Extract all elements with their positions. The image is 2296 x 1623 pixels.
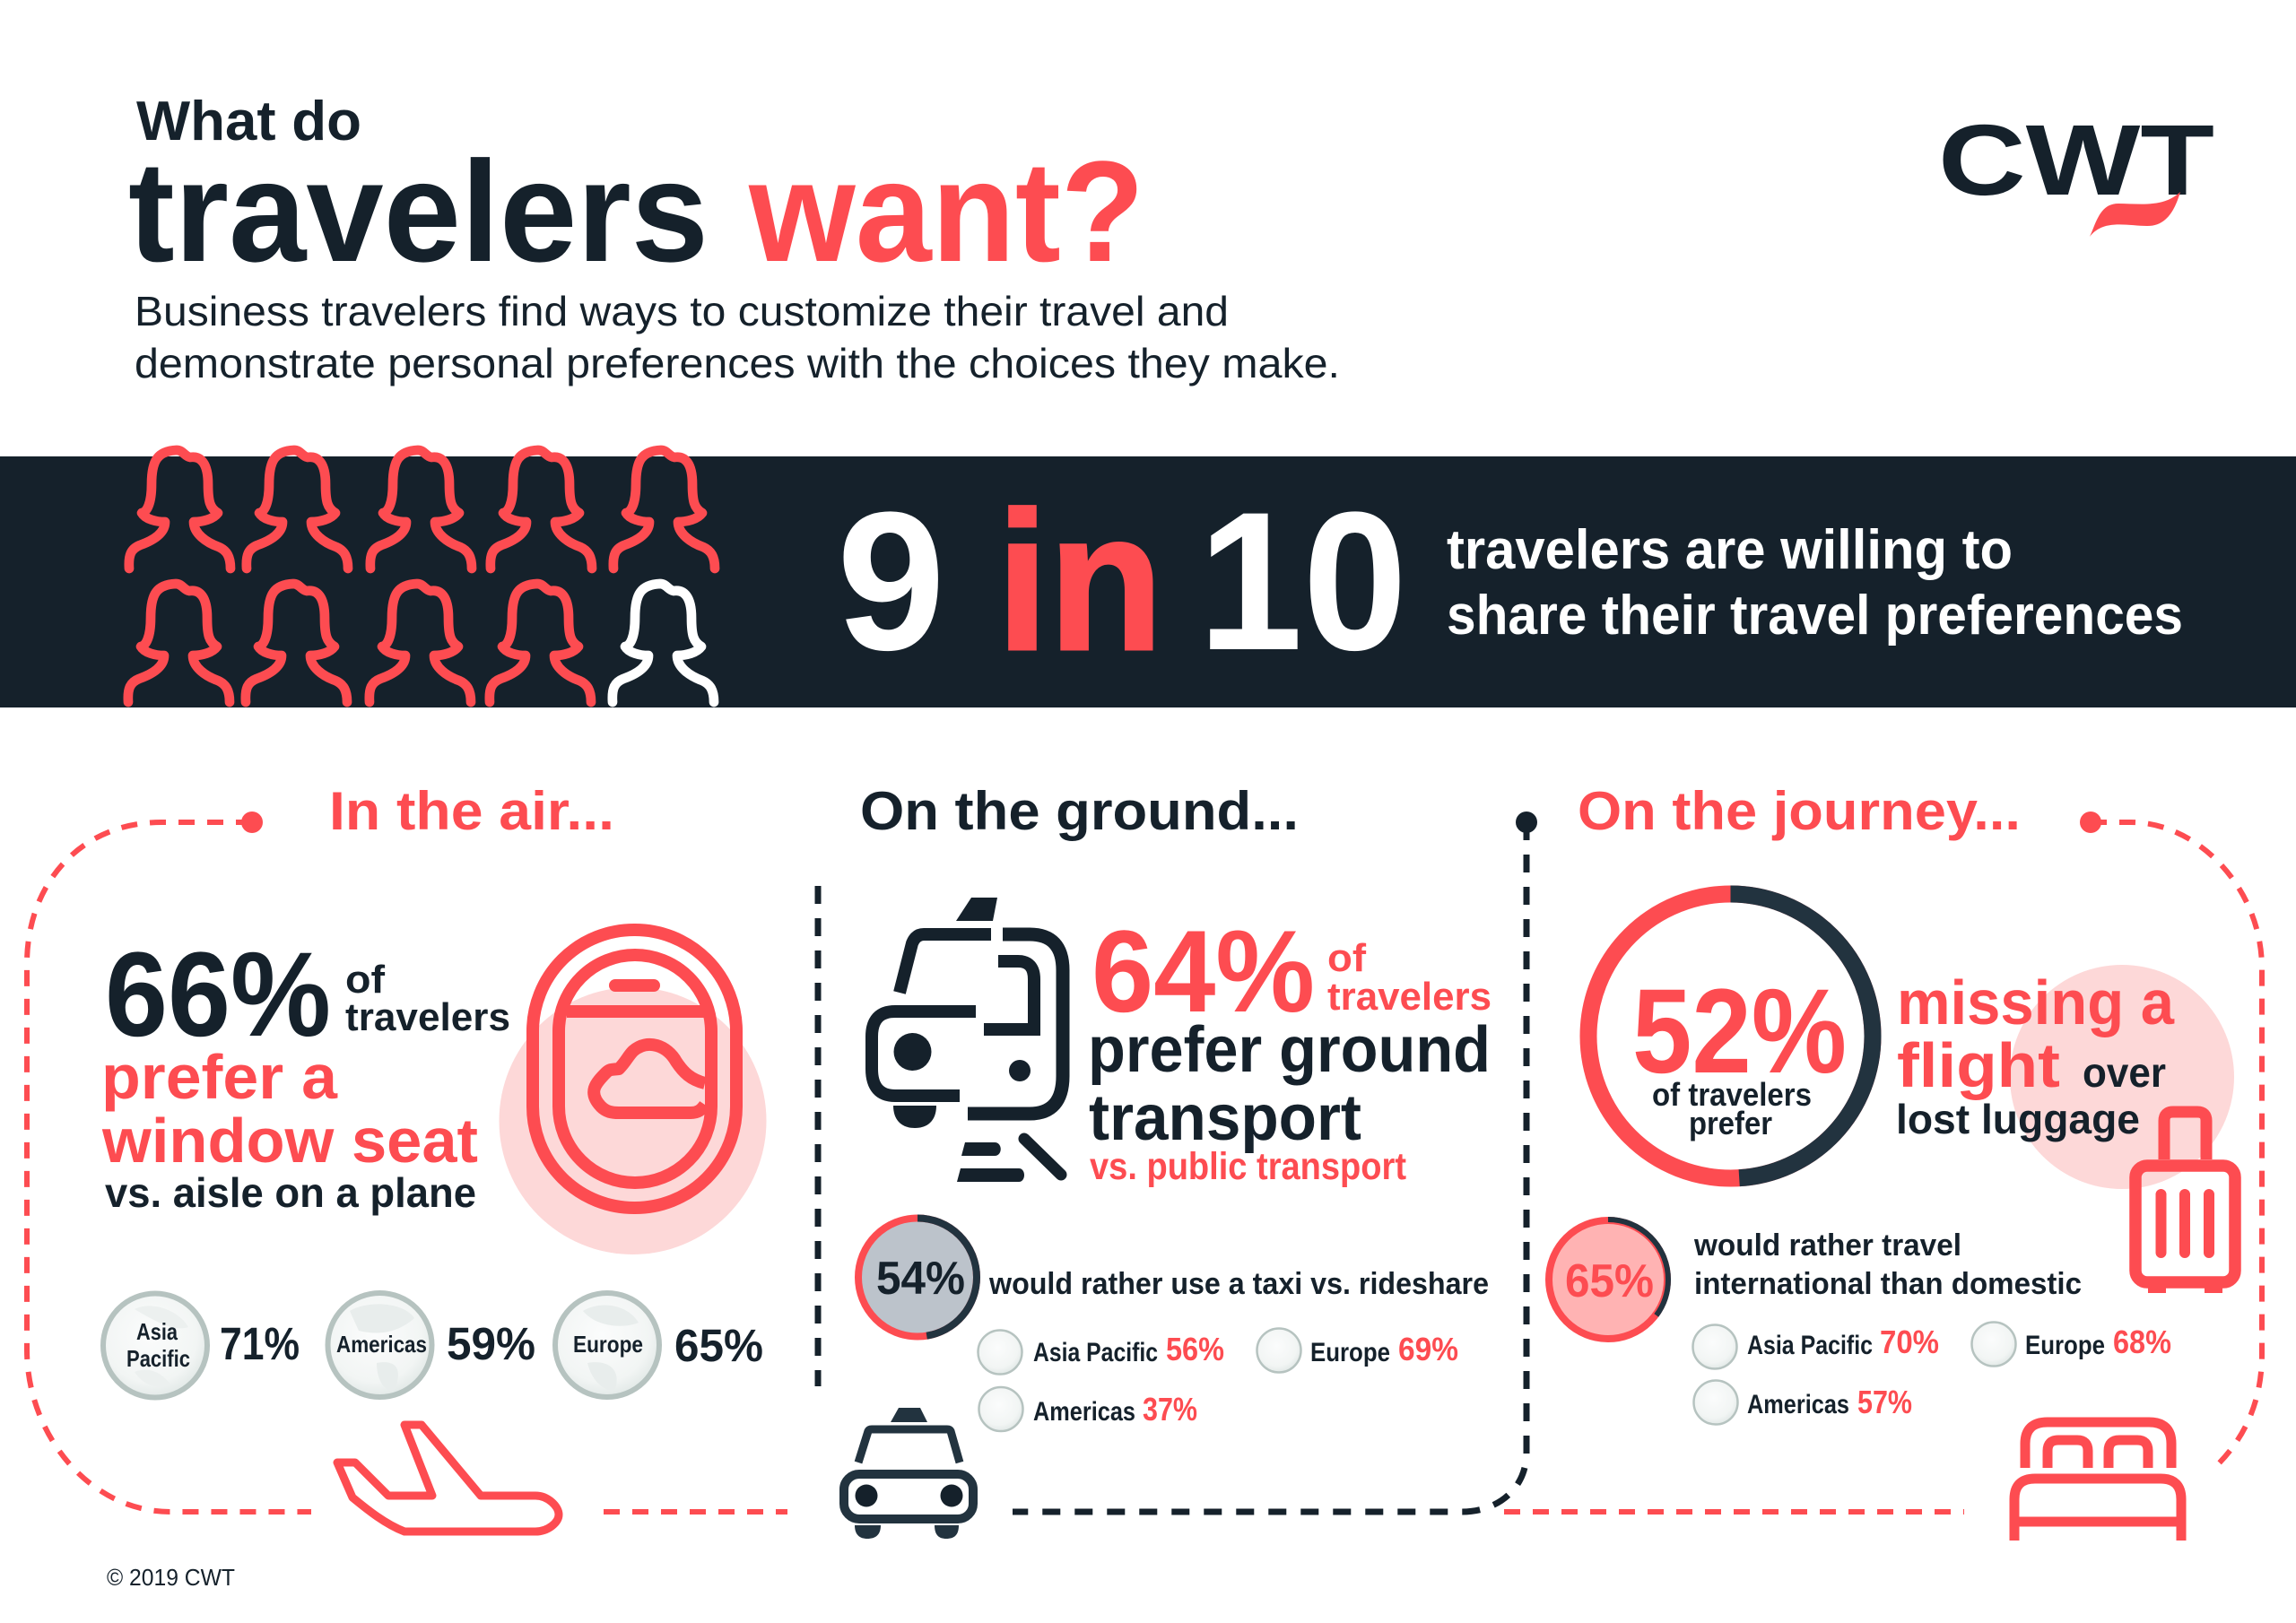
heading: On the ground: On the ground... — [860, 781, 1299, 841]
text: international than domestic — [1693, 1228, 2082, 1301]
region: Asia Pacific 70%: Asia Pacific — [1747, 1331, 1873, 1360]
stat: 66%: travelers — [345, 995, 510, 1039]
region: Asia Pacific 70%: 70% — [1880, 1324, 1939, 1360]
region: Asia Pacific 71% — [103, 1293, 300, 1397]
region: Europe 65% — [555, 1293, 763, 1397]
logo: CWT: CWT — [1938, 104, 2214, 216]
title: What do — [136, 91, 361, 152]
text: prefer ground transport: vs. public transport — [1090, 1145, 1406, 1188]
chart: 52% donut: of travelers — [1652, 1076, 1812, 1113]
text: missing a flight over lost luggage: over — [2083, 1049, 2166, 1096]
copyright: © 2019 CWT — [107, 1564, 235, 1591]
region: Americas 59%: 59% — [447, 1318, 535, 1369]
icon: bed — [2014, 1422, 2181, 1541]
chart: 65% donut: 65% — [1565, 1255, 1654, 1307]
stat: 9 in 10: 9 — [837, 471, 945, 691]
stat: 9 in 10 — [837, 471, 1407, 691]
panel: on the ground — [844, 898, 1492, 1539]
banner text: travelers are willing to — [1447, 519, 2013, 581]
chart: 52% donut: 52% — [1632, 965, 1847, 1098]
banner: 9 in 10 — [0, 450, 2296, 707]
text: taxi vs rideshare: would rather use a taxi vs. rideshare — [988, 1267, 1489, 1301]
text: missing a flight over lost luggage — [1896, 968, 2175, 1142]
stat: 64% — [1091, 906, 1492, 1037]
region: Asia Pacific 71%: 71% — [220, 1318, 300, 1369]
chart: 54% taxi donut: 54% — [876, 1253, 965, 1305]
title: travelers — [128, 131, 709, 291]
panel: on the journey — [1548, 894, 2235, 1541]
title — [128, 91, 1144, 291]
heading: On the journey: On the journey... — [1578, 781, 2021, 841]
panel: in the air — [101, 928, 766, 1532]
region: Americas 57% — [1693, 1381, 1912, 1424]
text: international than domestic: would rather travel — [1693, 1228, 1961, 1263]
heading: In the air: In the air... — [329, 781, 614, 841]
text: missing a flight over lost luggage: flight — [1897, 1030, 2060, 1100]
text: prefer ground transport: transport — [1089, 1082, 1361, 1154]
journey route: right red dashed line — [1504, 812, 2262, 1512]
subtitle: Business travelers find ways to customize their travel and — [135, 288, 1229, 334]
journey route: left red dashed line — [27, 812, 787, 1512]
stat: 64%: travelers — [1327, 975, 1492, 1019]
chart: 52% donut: prefer — [1689, 1105, 1772, 1141]
text: prefer a window seat — [101, 1042, 478, 1216]
region: Asia Pacific 56%: 56% — [1166, 1331, 1224, 1367]
text: prefer a window seat: prefer a — [101, 1042, 338, 1112]
text: prefer a window seat: vs. aisle on a plane — [105, 1169, 476, 1216]
text: prefer ground transport — [1088, 1014, 1491, 1188]
stat: 66% — [105, 928, 510, 1062]
stat: 9 in 10: in — [996, 471, 1163, 691]
region: Asia Pacific 56% — [978, 1331, 1224, 1374]
region: Americas 37% — [979, 1387, 1197, 1431]
region: Asia Pacific 71%: Asia — [136, 1318, 178, 1345]
region: Europe 69% — [1257, 1329, 1458, 1372]
region: Asia Pacific 56%: Asia Pacific — [1033, 1338, 1158, 1367]
banner text: share their travel preferences — [1447, 585, 2183, 647]
region: Europe 69%: 69% — [1398, 1331, 1458, 1367]
region: Americas 57%: 57% — [1857, 1384, 1912, 1420]
journey route: middle dark dashed line — [818, 812, 1537, 1512]
stat: 66%: of — [345, 958, 385, 1002]
icon: taxi — [844, 1408, 973, 1539]
region: Europe 68% — [1971, 1322, 2171, 1367]
region: Europe 69%: Europe — [1310, 1338, 1390, 1367]
logo: CWT — [1938, 104, 2214, 237]
banner text — [1447, 519, 2183, 647]
region: Asia Pacific 71%: Pacific — [126, 1345, 190, 1372]
text: missing a flight over lost luggage: lost luggage — [1896, 1096, 2140, 1142]
region: Europe 65%: Europe — [573, 1331, 643, 1358]
chart: 54% taxi donut — [858, 1218, 977, 1336]
region: Americas 37%: 37% — [1143, 1391, 1197, 1428]
region: Europe 68%: 68% — [2113, 1324, 2171, 1360]
region: Asia Pacific 70% — [1693, 1324, 1939, 1368]
subtitle — [135, 288, 1340, 386]
text: missing a flight over lost luggage: missing a — [1897, 968, 2175, 1037]
icon: airplane window — [499, 930, 766, 1254]
region: Europe 65%: 65% — [674, 1320, 763, 1371]
region: Americas 57%: Americas — [1747, 1390, 1849, 1419]
text: prefer ground transport: prefer ground — [1088, 1014, 1491, 1086]
subtitle: demonstrate personal preferences with the choices they make. — [135, 340, 1340, 386]
region: Americas 59% — [328, 1293, 535, 1397]
chart: 52% donut — [1588, 894, 1873, 1178]
region: Europe 68%: Europe — [2025, 1331, 2105, 1360]
stat: 66%: 66% — [105, 928, 331, 1062]
stat: 64%: of — [1327, 936, 1366, 980]
region: Americas 37%: Americas — [1033, 1397, 1135, 1427]
chart: 65% donut — [1548, 1219, 1668, 1340]
stat: 64%: 64% — [1091, 906, 1315, 1037]
stat: 9 in 10: 10 — [1198, 471, 1407, 691]
title: want? — [748, 131, 1144, 291]
text: international than domestic: international than domestic — [1694, 1267, 2082, 1301]
text: prefer a window seat: window seat — [101, 1106, 478, 1176]
region: Americas 59%: Americas — [336, 1331, 427, 1358]
icon: taxi and train — [872, 898, 1063, 1182]
icon: ten traveler silhouettes — [128, 450, 715, 702]
icon: airplane — [337, 1425, 559, 1532]
icon: suitcase — [2010, 965, 2235, 1293]
